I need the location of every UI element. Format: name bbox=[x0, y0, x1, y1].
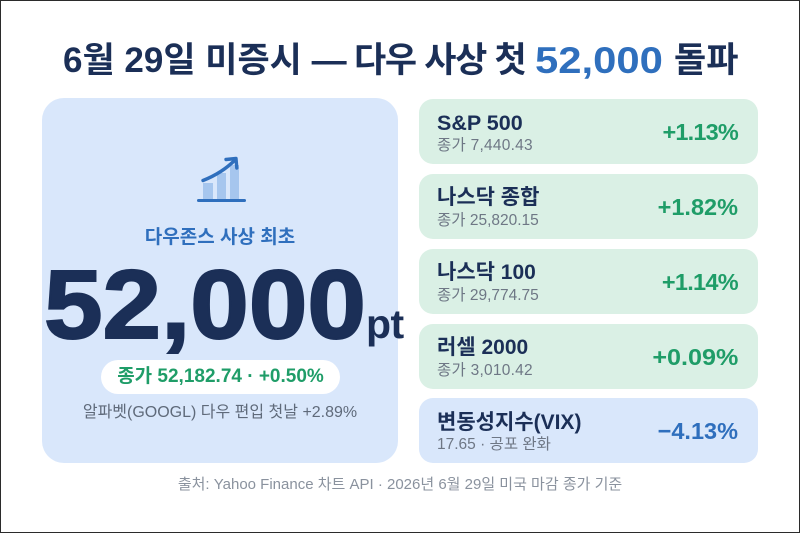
name: 나스닥 종합 bbox=[437, 186, 539, 209]
close: 17.65 · 공포 완화 bbox=[437, 436, 551, 453]
title: 돌파 bbox=[674, 41, 738, 80]
card: Nasdaq Composite bbox=[419, 174, 758, 239]
unit pt: pt bbox=[366, 301, 404, 347]
change: −4.13% bbox=[658, 418, 738, 444]
closing price pill: 종가 52,182.74 · +0.50% bbox=[117, 366, 324, 387]
card: VIX bbox=[419, 398, 758, 463]
change: +1.14% bbox=[662, 269, 738, 295]
title: 6월 29일 미증시 — bbox=[63, 41, 347, 80]
panel: Dow 52,000 hero bbox=[42, 98, 398, 463]
icon: rising bar chart bbox=[197, 156, 246, 202]
big number bbox=[44, 250, 404, 359]
title bbox=[63, 40, 738, 81]
name: 나스닥 100 bbox=[437, 261, 536, 284]
close: 종가 25,820.15 bbox=[437, 212, 539, 229]
value 52,000: 52,000 bbox=[44, 250, 366, 359]
change: +1.13% bbox=[662, 119, 738, 145]
close: 종가 29,774.75 bbox=[437, 287, 539, 304]
card: Russell 2000 bbox=[419, 324, 758, 389]
Alphabet note: 알파벳(GOOGL) 다우 편입 첫날 +2.89% bbox=[83, 404, 357, 421]
name: 변동성지수(VIX) bbox=[437, 411, 581, 434]
title: 다우 사상 첫 bbox=[354, 41, 525, 80]
change: +1.82% bbox=[658, 194, 738, 220]
name: S&P 500 bbox=[437, 111, 523, 135]
title: 52,000 bbox=[535, 40, 663, 81]
change: +0.09% bbox=[652, 344, 738, 370]
card: S&P 500 bbox=[419, 99, 758, 164]
closing price pill bbox=[101, 360, 340, 394]
source footnote: 출처: Yahoo Finance 차트 API · 2026년 6월 29일 미국 마감 종가 기준 bbox=[178, 476, 622, 493]
name: 러셀 2000 bbox=[437, 336, 528, 359]
close: 종가 7,440.43 bbox=[437, 137, 533, 154]
close: 종가 3,010.42 bbox=[437, 362, 533, 379]
card: Nasdaq 100 bbox=[419, 249, 758, 314]
hero label: 다우존스 사상 최초 bbox=[145, 227, 295, 248]
